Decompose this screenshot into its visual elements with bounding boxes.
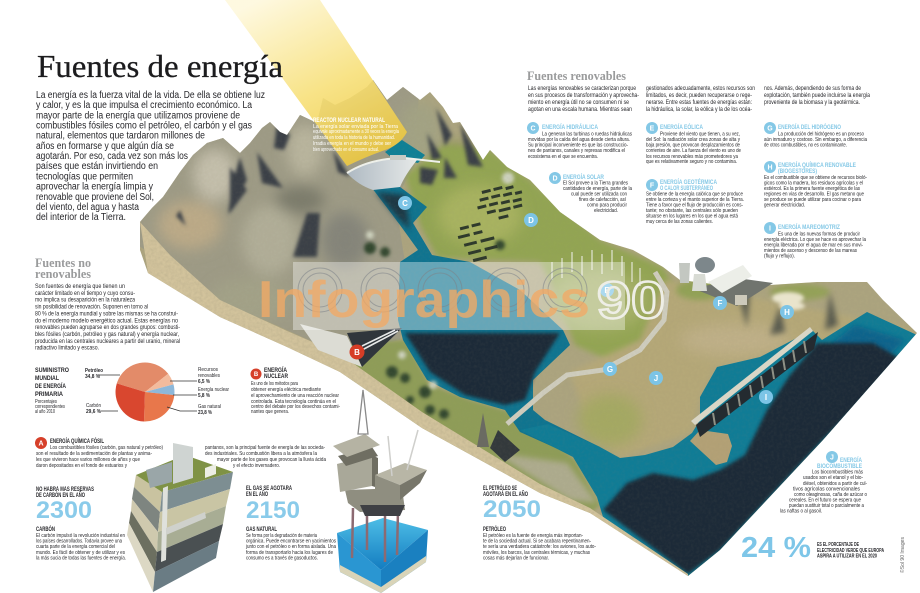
dam bbox=[347, 155, 440, 190]
note D: energía solar bbox=[549, 172, 633, 214]
note H: energía química renovable: H bbox=[767, 164, 773, 172]
pie labels: renovables bbox=[198, 373, 220, 379]
pie chart bbox=[85, 363, 229, 422]
pie labels: Gas natural bbox=[198, 404, 221, 410]
text: fuentes renovables: Las energías renovables se caracterizan porque bbox=[528, 85, 636, 92]
note D: energía solar: cual puede ser utilizada con bbox=[571, 192, 627, 198]
mountain light patches bbox=[155, 98, 464, 277]
note B: energía nuclear: ENERGÍA bbox=[264, 365, 287, 374]
text: fuentes renovables bbox=[528, 85, 870, 113]
gas text bbox=[245, 485, 337, 562]
pie chart heading: MUNDIAL bbox=[35, 375, 59, 382]
pie labels: Carbón bbox=[86, 403, 101, 409]
intro text: combustibles fósiles como el petróleo, el carbón y el gas bbox=[36, 120, 252, 132]
note C: energía hidráulica: Su principal inconveniente es que las construccio- bbox=[528, 142, 628, 148]
note I: energía mareomotriz: ENERGÍA MAREOMOTRIZ bbox=[778, 222, 840, 231]
text: fuentes renovables: limitados, es decir, pueden recuperarse o rege- bbox=[646, 92, 752, 99]
note F: energía geotérmica: muy cerca de las zonas calientes. bbox=[646, 219, 713, 225]
reactor callout: utilizada en toda la historia de la humanidad. bbox=[313, 135, 395, 141]
water: river and lake bbox=[372, 187, 600, 450]
note I: energía mareomotriz: energía eléctrica. Lo que se hace es aprovechar la bbox=[764, 237, 867, 243]
coal text: mundo. Es fácil de obtener y de utilizar y es bbox=[36, 550, 125, 556]
watermark: Infographics bbox=[258, 271, 590, 329]
petroleum text: El petróleo es la fuente de energía más importan- bbox=[483, 533, 583, 539]
intro text bbox=[36, 90, 265, 223]
note J: energía biocombustible: tivos agrícolas convencionales bbox=[793, 486, 860, 492]
lower green bank bbox=[340, 340, 600, 513]
text: fuentes no renovables: radiactivo limitado y escaso. bbox=[35, 344, 99, 352]
text: fuentes renovables: en sus procesos de transformación y aprovecha- bbox=[528, 92, 639, 99]
note C: energía hidráulica: C bbox=[530, 126, 536, 132]
reactor callout: bien aprovechado en el consumo actual. bbox=[313, 147, 379, 153]
note J: energía biocombustible: las naftas o al gasoil. bbox=[780, 508, 822, 514]
note J: energía biocombustible bbox=[780, 451, 867, 514]
note G: energía del hidrógeno: ENERGÍA DEL HIDRÓGENO bbox=[778, 122, 841, 131]
note C: energía hidráulica: movidas por la caída del agua desde cierta altura. bbox=[528, 137, 630, 143]
note D: energía solar: cantidades de energía, parte de la bbox=[563, 186, 633, 192]
note A: energía química fósil: pantanos, son la principal fuente de energía de las socieda- bbox=[205, 445, 325, 451]
text: fuentes no renovables: renovables pueden agruparse en dos grandes grupos: combusti- bbox=[35, 324, 180, 331]
stat: 24 % bbox=[741, 532, 884, 564]
note E: energía eólica: ENERGÍA EÓLICA bbox=[660, 122, 703, 131]
pie chart heading bbox=[35, 367, 69, 415]
text: fuentes no renovables: carácter limitado en el tiempo y cuyo consu- bbox=[35, 290, 135, 297]
note H: energía química renovable: se produce se puede utilizar para cocinar o para bbox=[764, 197, 862, 203]
text: fuentes renovables: nerarse. Entre estas fuentes de energías están: bbox=[646, 99, 752, 106]
title: Fuentes de energía bbox=[37, 48, 283, 84]
note I: energía mareomotriz bbox=[764, 222, 867, 260]
heading: fuentes no renovables: Fuentes no bbox=[35, 255, 91, 270]
note A: energía química fósil: mayor parte de los gases que provocan la lluvia ácida bbox=[217, 457, 327, 463]
text: fuentes no renovables: producida en las centrales nucleares a partir del uranio, mineral bbox=[35, 338, 180, 345]
pie labels: 29,6 % bbox=[86, 409, 101, 415]
note E: energía eólica: del Sol: la radiación solar crea zonas de alta y bbox=[646, 137, 740, 143]
land base bbox=[130, 70, 920, 580]
gas text: Se forma por la degradación de materia bbox=[246, 533, 318, 539]
note F: energía geotérmica: ENERGÍA GEOTÉRMICA bbox=[660, 177, 717, 186]
text: fuentes renovables: proveniente de la biomasa y la geotérmica. bbox=[764, 99, 860, 106]
water: bay and sea bbox=[520, 312, 917, 576]
thermal power plant bbox=[679, 257, 773, 306]
pie chart heading: SUMINISTRO bbox=[35, 367, 69, 374]
heading: fuentes no renovables: renovables bbox=[35, 266, 91, 281]
panel: terrain illustration bbox=[130, 70, 920, 580]
map labels: H bbox=[784, 308, 790, 317]
map labels: F bbox=[718, 299, 723, 308]
stat: 24 %: ASPIRA A UTILIZAR EN EL 2020 bbox=[817, 554, 877, 560]
note H: energía química renovable: ENERGÍA QUÍMICA RENOVABLE bbox=[778, 160, 856, 169]
illustration: coal mine cross-section bbox=[127, 443, 233, 592]
text: fuentes no renovables: sin posibilidad de renovación. Suponen en torno al bbox=[35, 304, 148, 310]
reactor callout bbox=[313, 117, 400, 153]
mountain mass bbox=[140, 80, 418, 344]
petroleum text bbox=[483, 484, 596, 562]
note I: energía mareomotriz: I bbox=[769, 226, 771, 232]
coal text: El carbón impulsó la revolución industrial en bbox=[36, 533, 125, 539]
pie labels: 23,8 % bbox=[198, 410, 212, 416]
watermark: 90 bbox=[597, 272, 665, 330]
peninsula bbox=[690, 430, 732, 465]
note F: energía geotérmica: entre la corteza y el manto superior de la Tierra. bbox=[646, 197, 744, 203]
intro text: La energía es la fuerza vital de la vida. De ella se obtiene luz bbox=[36, 90, 265, 101]
petroleum text: móviles, los barcos, las centrales térmicas, y muchas bbox=[483, 550, 590, 556]
note E: energía eólica: los recursos renovables más prometedores ya bbox=[646, 154, 739, 160]
petroleum text: te de la sociedad actual. Si se acabara repentinamen- bbox=[483, 538, 591, 544]
map labels: J bbox=[654, 374, 658, 383]
note G: energía del hidrógeno: de otros combustibles, no es contaminante. bbox=[764, 142, 847, 148]
coal text: los países desarrollados. Todavía provee una bbox=[36, 538, 123, 544]
pie chart heading: al año 2010 bbox=[35, 409, 55, 415]
note B: energía nuclear bbox=[250, 365, 340, 415]
note H: energía química renovable: regiones en vías de desarrollo. El gas metano que bbox=[764, 192, 864, 198]
pie labels: 5,8 % bbox=[198, 393, 210, 399]
intro text: agotarán. Por eso, cada vez son más los bbox=[36, 151, 188, 162]
note B: energía nuclear: controlada. Esta tecnología continúa en el bbox=[251, 399, 336, 405]
intro text: del viento, del agua y hasta bbox=[36, 202, 139, 213]
note F: energía geotérmica: Se obtiene de la energía calórica que se produce bbox=[646, 192, 743, 198]
sun beam bbox=[225, 0, 407, 166]
note I: energía mareomotriz: Es una de las nuevas formas de producir bbox=[778, 232, 860, 238]
note F: energía geotérmica bbox=[646, 177, 744, 225]
map labels: C bbox=[402, 199, 408, 208]
pie chart heading: PRIMARIA bbox=[35, 391, 63, 398]
note D: energía solar: como para producir bbox=[587, 202, 627, 208]
petroleum text: AGOTARÁ EN EL AÑO bbox=[483, 491, 528, 498]
rock shadows bbox=[176, 108, 483, 257]
pie labels: Petróleo bbox=[85, 368, 104, 374]
trees bbox=[364, 240, 505, 419]
note A: energía química fósil: A bbox=[38, 440, 44, 448]
text: fuentes no renovables: mo implica su desaparición en la naturaleza bbox=[35, 296, 135, 304]
note C: energía hidráulica: nes de pantanos, canales y represas modifica el bbox=[528, 148, 625, 154]
coal text bbox=[36, 486, 126, 562]
intro text: tecnologías que permiten bbox=[36, 171, 133, 182]
note B: energía nuclear: centro del debate por los desechos contami- bbox=[251, 404, 340, 410]
tidal pier bbox=[691, 327, 818, 437]
oil derrick on land bbox=[477, 413, 489, 447]
road and bridge bbox=[507, 272, 667, 424]
illustration: offshore oil platform bbox=[333, 390, 428, 593]
sea dark bbox=[603, 343, 903, 574]
reactor callout: Irradia energía en el mundo y debe ser bbox=[313, 141, 391, 147]
note H: energía química renovable: (BIOGESTORES) bbox=[778, 168, 817, 175]
note E: energía eólica: baja presión, que provocan desplazamientos de bbox=[646, 142, 740, 148]
pie labels: Energía nuclear bbox=[198, 387, 229, 393]
biomass heap bbox=[772, 292, 805, 310]
reactor callout: La energía solar enviada por la Tierra bbox=[313, 124, 399, 130]
map labels: B bbox=[354, 348, 360, 357]
windmills bbox=[552, 250, 640, 286]
pie labels: Recursos bbox=[198, 367, 218, 373]
note F: energía geotérmica: tante; no obstante, las centrales sólo pueden bbox=[646, 208, 738, 214]
note A: energía química fósil: Los combustibles fósiles (carbón, gas natural y petróleo) bbox=[50, 445, 163, 451]
note J: energía biocombustible: cereales. En el futuro se espera que bbox=[789, 498, 861, 504]
map labels bbox=[350, 196, 794, 404]
note H: energía química renovable bbox=[764, 160, 867, 208]
pie labels: 6,5 % bbox=[198, 379, 210, 385]
solar panels bbox=[449, 182, 536, 264]
petroleum text: EL PETRÓLEO SE bbox=[483, 484, 517, 492]
note D: energía solar: fines de calefacción, así bbox=[579, 197, 626, 203]
pie chart heading: Porcentajes bbox=[35, 399, 57, 405]
gas text: forma de transportarlo hacia los lugares de bbox=[246, 550, 333, 556]
pie labels: 34,8 % bbox=[85, 374, 100, 380]
note I: energía mareomotriz: (flujo y reflujo). bbox=[764, 254, 795, 260]
note I: energía mareomotriz: energía liberada por el agua de mar en sus movi- bbox=[764, 242, 863, 248]
note B: energía nuclear: obtener energía eléctrica mediante bbox=[251, 387, 321, 393]
petroleum text: te sería una verdadera catástrofe: los aviones, los auto- bbox=[483, 544, 596, 550]
text: fuentes no renovables bbox=[35, 283, 180, 352]
intro text: natural, elementos que tardaron millones de bbox=[36, 131, 205, 142]
credit: ©Sol 90 Images bbox=[899, 537, 906, 573]
note F: energía geotérmica: F bbox=[650, 182, 655, 190]
note E: energía eólica: E bbox=[650, 126, 655, 132]
note E: energía eólica: Proviene del viento que tienen, a su vez, bbox=[660, 132, 740, 138]
note J: energía biocombustible: puedan sustituir total o parcialmente a bbox=[789, 503, 865, 509]
note D: energía solar: ENERGÍA SOLAR bbox=[563, 172, 604, 181]
petroleum text: cosas más dejarían de funcionar. bbox=[483, 556, 549, 562]
gas text: 2150 bbox=[246, 497, 300, 524]
note A: energía química fósil bbox=[35, 436, 327, 469]
note B: energía nuclear: Es uno de los métodos para bbox=[251, 381, 299, 387]
shoreline shadows bbox=[740, 292, 838, 335]
note A: energía química fósil: daron depositados en el fondo de estuarios y bbox=[36, 463, 127, 469]
pie chart heading: correspondientes bbox=[35, 404, 65, 410]
pie labels bbox=[85, 367, 229, 416]
gas text: EN EL AÑO bbox=[246, 491, 268, 498]
lake dark core bbox=[376, 192, 410, 230]
note E: energía eólica: corrientes de aire. La fuerza del viento es uno de bbox=[646, 148, 741, 154]
text: fuentes renovables: gestionados adecuadamente, estos recursos son bbox=[646, 85, 755, 92]
text: fuentes renovables: agotan en una escala humana. Mientras sean bbox=[528, 106, 632, 113]
right tan land bbox=[576, 279, 851, 452]
heading: fuentes renovables: Fuentes renovables bbox=[527, 68, 626, 83]
coal text: CARBÓN bbox=[36, 525, 55, 533]
note F: energía geotérmica: Tiene a favor que el flujo de producción es cons- bbox=[646, 202, 743, 208]
note E: energía eólica: que es relativamente seguro y no contamina. bbox=[646, 159, 737, 165]
text: fuentes no renovables: 80 % de la energía mundial y sobre las mismas se ha construi- bbox=[35, 310, 178, 318]
text: fuentes no renovables: Son fuentes de energía que tienen un bbox=[35, 283, 125, 290]
intro text: años en formarse y que algún día se bbox=[36, 141, 174, 152]
petroleum text: PETRÓLEO bbox=[483, 525, 506, 533]
note D: energía solar: D bbox=[552, 176, 558, 182]
note B: energía nuclear: B bbox=[254, 372, 259, 378]
note G: energía del hidrógeno: G bbox=[767, 126, 773, 132]
note C: energía hidráulica: La generan las turbinas o ruedas hidráulicas bbox=[542, 132, 632, 138]
pie chart heading: DE ENERGÍA bbox=[35, 381, 66, 390]
stat: 24 %: 24 % bbox=[741, 532, 811, 564]
reactor callout: equivale aproximadamente a 30 veces la energía bbox=[313, 129, 400, 135]
note D: energía solar: electricidad. bbox=[594, 208, 618, 214]
note A: energía química fósil: des industriales. Su combustión libera a la atmósfera la bbox=[205, 451, 318, 457]
note J: energía biocombustible: Los biocombustibles más bbox=[812, 470, 863, 476]
note H: energía química renovable: estiércol. Es la primera fuente energética de las bbox=[764, 186, 860, 192]
green hills bbox=[405, 145, 682, 362]
note B: energía nuclear: el aprovechamiento de una reacción nuclear bbox=[251, 393, 339, 399]
text: fuentes renovables: la hidráulica, la solar, la eólica y la de los océa- bbox=[646, 106, 752, 113]
water: reservoir bbox=[385, 140, 425, 163]
note B: energía nuclear: NUCLEAR bbox=[264, 373, 288, 380]
gas text: EL GAS SE AGOTARÁ bbox=[246, 485, 292, 492]
map labels: D bbox=[528, 216, 534, 225]
stat: 24 %: ELECTRICIDAD VERDE QUE EUROPA bbox=[817, 548, 884, 554]
text: fuentes renovables: nos. Además, dependiendo de sus forma de bbox=[764, 85, 861, 92]
note C: energía hidráulica bbox=[527, 122, 632, 160]
note C: energía hidráulica: ENERGÍA HIDRÁULICA bbox=[542, 122, 598, 131]
note J: energía biocombustible: ENERGÍA bbox=[840, 455, 862, 464]
petroleum text: 2050 bbox=[483, 496, 541, 523]
note A: energía química fósil: son el resultado de la sedimentación de plantas y anima- bbox=[36, 451, 152, 457]
rock strip edge bbox=[130, 220, 700, 580]
note F: energía geotérmica: situarse en los lugares en los que el agua está bbox=[646, 214, 739, 220]
text: fuentes renovables: explotación, también puede incluirse la energía bbox=[764, 92, 870, 99]
coal text: DE CARBÓN EN EL AÑO bbox=[36, 491, 85, 499]
note E: energía eólica bbox=[646, 122, 741, 165]
nuclear plant bbox=[300, 324, 402, 367]
text: fuentes no renovables: do el moderno modelo energético actual. Estas energías no bbox=[35, 318, 178, 324]
intro text: y calor, y es la que impulsa el crecimiento económico. La bbox=[36, 100, 252, 111]
note B: energía nuclear: nantes que genera. bbox=[251, 409, 289, 415]
note A: energía química fósil: les que vivieron hace varios millones de años y que bbox=[36, 457, 140, 463]
note H: energía química renovable: Es el combustible que se obtiene de recursos bioló- bbox=[764, 175, 867, 181]
intro text: países que están invirtiendo en bbox=[36, 161, 158, 172]
intro text: mayor parte de la energía que utilizamos proviene de bbox=[36, 110, 240, 122]
coal text: la más sucia de todas las fuentes de energía. bbox=[36, 556, 126, 562]
note A: energía química fósil: ENERGÍA QUÍMICA FÓSIL bbox=[50, 436, 104, 445]
text: fuentes renovables: miento en energía útil no se consumen ni se bbox=[528, 99, 629, 106]
map labels: G bbox=[607, 365, 613, 374]
note J: energía biocombustible: BIOCOMBUSTIBLE bbox=[817, 463, 862, 470]
note H: energía química renovable: generar electricidad. bbox=[764, 202, 805, 208]
coal text: NO HABRÁ MÁS RESERVAS bbox=[36, 486, 94, 493]
gas text: junto con el petróleo o en forma aislada. Una bbox=[245, 544, 337, 550]
note J: energía biocombustible: usados son el etanol y el bio- bbox=[803, 475, 863, 481]
text: fuentes no renovables: bles fósiles (carbón, petróleo y gas natural) y energía nuclear, bbox=[35, 331, 179, 338]
note H: energía química renovable: gicos como la madera, los residuos agrícolas y el bbox=[764, 180, 863, 186]
note J: energía biocombustible: diésel, obtenidos a partir de cul- bbox=[803, 481, 867, 487]
gas text: consumo es a través de gasoductos. bbox=[246, 556, 318, 562]
heading: fuentes no renovables bbox=[35, 255, 91, 281]
note A: energía química fósil: y el efecto invernadero. bbox=[233, 463, 280, 469]
note D: energía solar: El Sol provee a la Tierra grandes bbox=[563, 180, 628, 186]
reactor callout: REACTOR NUCLEAR NATURAL bbox=[313, 117, 385, 124]
map labels: E bbox=[604, 286, 610, 295]
note J: energía biocombustible: J bbox=[830, 454, 834, 462]
intro text: del interior de la Tierra. bbox=[36, 212, 126, 223]
gas text: orgánica. Puede encontrarse en yacimientos bbox=[246, 538, 336, 544]
texture bbox=[388, 149, 904, 560]
intro text: renovable que proviene del Sol, bbox=[36, 192, 154, 203]
note G: energía del hidrógeno: La producción del hidrógeno es un proceso bbox=[778, 132, 864, 138]
stat: 24 %: ES EL PORCENTAJE DE bbox=[817, 542, 859, 548]
note G: energía del hidrógeno bbox=[764, 122, 868, 148]
note F: energía geotérmica: O CALOR SUBTERRÁNEO bbox=[660, 183, 713, 192]
note J: energía biocombustible: como oleaginosas, caña de azúcar o bbox=[794, 492, 867, 498]
gas text: GAS NATURAL bbox=[246, 527, 277, 533]
coal text: 2300 bbox=[36, 497, 92, 524]
note G: energía del hidrógeno: aún inmaduro y costoso. Sin embargo, a diferencia bbox=[764, 137, 868, 143]
map labels: I bbox=[765, 393, 767, 402]
note I: energía mareomotriz: mientos de ascenso y descenso de las mareas bbox=[764, 248, 857, 254]
note C: energía hidráulica: ecosistema en el que se encuentra. bbox=[528, 154, 598, 160]
watermark bbox=[258, 262, 665, 330]
intro text: aprovechar la energía limpia y bbox=[36, 182, 153, 193]
coal text: cuarta parte de la energía comercial del bbox=[36, 544, 115, 550]
